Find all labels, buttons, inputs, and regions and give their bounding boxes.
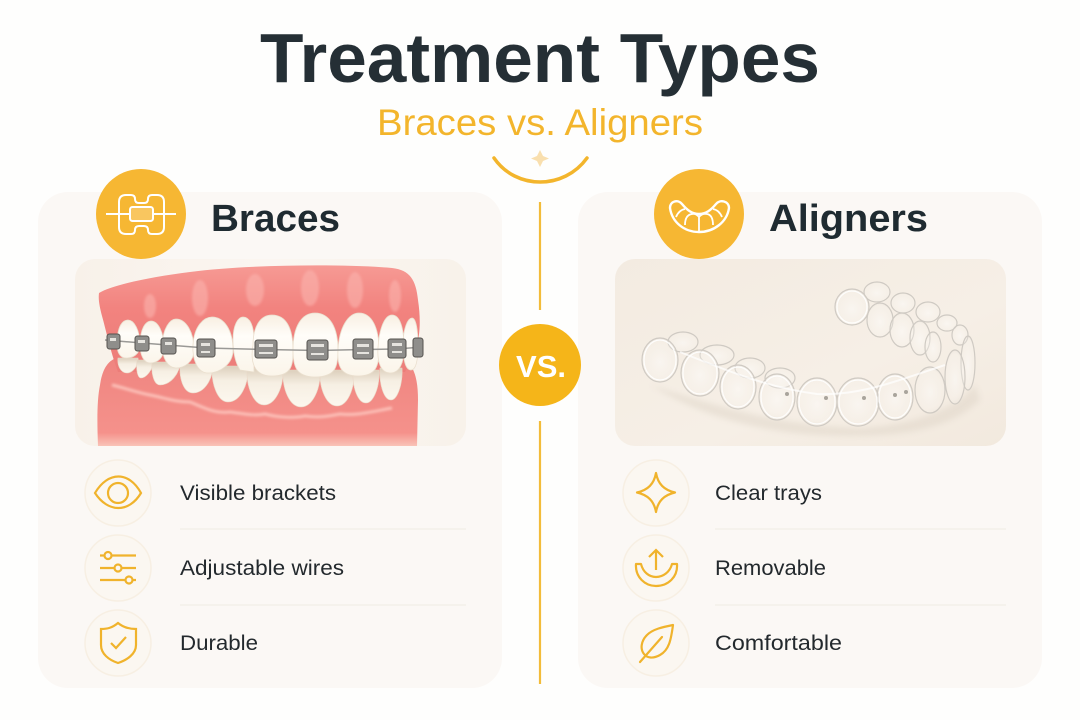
divider: centre line [539, 202, 541, 684]
photo: clear aligner tray [615, 259, 1006, 446]
heading: braces: Braces [211, 198, 340, 240]
panel background [38, 192, 502, 688]
row: comfortable [623, 610, 842, 676]
row: removable: Removable [715, 556, 826, 580]
panel: braces [75, 169, 466, 677]
icon: smile with sparkle [494, 150, 587, 182]
row: durable: Durable [180, 631, 258, 655]
badge: vs [499, 324, 581, 406]
panel background [578, 192, 1042, 688]
row: adjustable wires [85, 535, 344, 601]
heading: aligners: Aligners [769, 198, 928, 240]
brackets [107, 334, 423, 360]
row: comfortable: Comfortable [715, 631, 842, 655]
row: visible brackets: Visible brackets [180, 481, 336, 505]
row: adjustable wires: Adjustable wires [180, 556, 344, 580]
badge: vs: VS. [516, 349, 566, 384]
upper teeth [117, 313, 418, 377]
row: clear trays: Clear trays [715, 481, 822, 505]
row: clear trays [623, 460, 822, 526]
row: durable [85, 610, 258, 676]
row: removable [623, 535, 826, 601]
panel: aligners [615, 169, 1006, 677]
lower teeth [118, 358, 402, 407]
title: Treatment Types [260, 19, 820, 97]
icon: braces badge [96, 169, 186, 259]
row: visible brackets [85, 460, 336, 526]
subtitle: Braces vs. Aligners [377, 102, 703, 143]
photo: teeth with braces [75, 259, 466, 446]
icon: aligner badge [654, 169, 744, 259]
